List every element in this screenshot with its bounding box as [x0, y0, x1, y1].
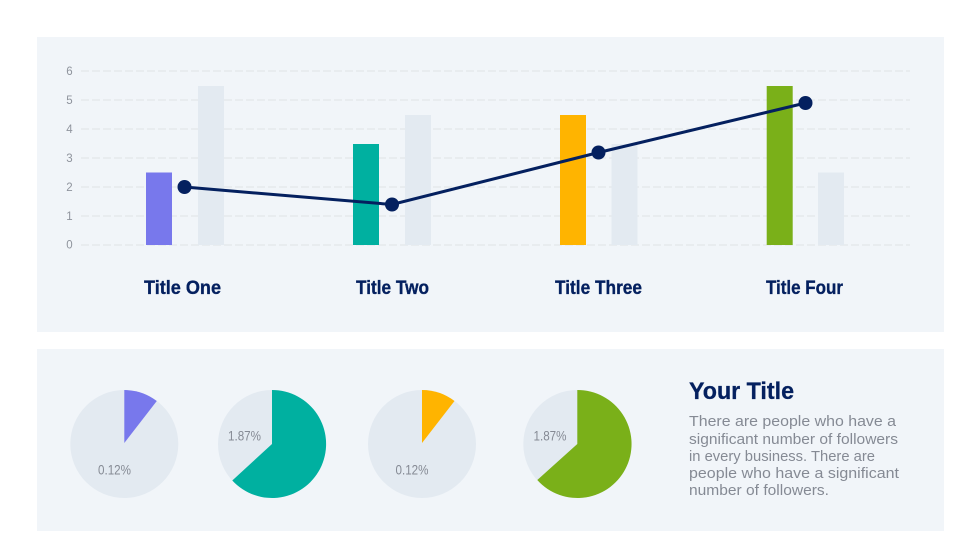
category titles: Title Three — [555, 278, 642, 299]
text block: description — [689, 413, 900, 499]
pie: teal 1.87% — [218, 390, 326, 498]
panel: chart background — [37, 37, 944, 332]
text block: description: in every business. There are — [689, 448, 875, 465]
y axis labels: 2 — [66, 182, 73, 194]
line chart — [178, 96, 812, 212]
text block: description: people who have a significant — [689, 465, 900, 482]
pie: teal 1.87%: 1.87% — [228, 428, 261, 444]
pie: green 1.87%: 1.87% — [534, 428, 566, 444]
heading: your title: Your Title — [689, 378, 794, 405]
pie: orange 0.12%: 0.12% — [396, 462, 428, 478]
category titles — [144, 278, 844, 299]
y axis labels: 4 — [66, 124, 73, 136]
pie: green 1.87% — [523, 390, 632, 498]
y axis labels: 6 — [66, 66, 73, 78]
y axis labels — [66, 66, 73, 252]
pie: purple 0.12% — [70, 390, 178, 498]
y axis labels: 3 — [66, 153, 73, 165]
category titles: Title One — [144, 278, 221, 299]
text block: description: number of followers. — [689, 482, 829, 499]
text block: description: significant number of followers — [689, 431, 898, 448]
pie: orange 0.12% — [368, 390, 476, 498]
y axis labels: 5 — [66, 95, 73, 107]
y axis labels: 1 — [66, 211, 73, 223]
y axis labels: 0 — [66, 240, 73, 252]
text block: description: There are people who have a — [689, 413, 897, 430]
pie: purple 0.12%: 0.12% — [98, 462, 131, 478]
bar chart — [146, 86, 844, 245]
category titles: Title Four — [766, 278, 844, 299]
category titles: Title Two — [356, 278, 429, 299]
panel: summary background — [37, 349, 944, 531]
